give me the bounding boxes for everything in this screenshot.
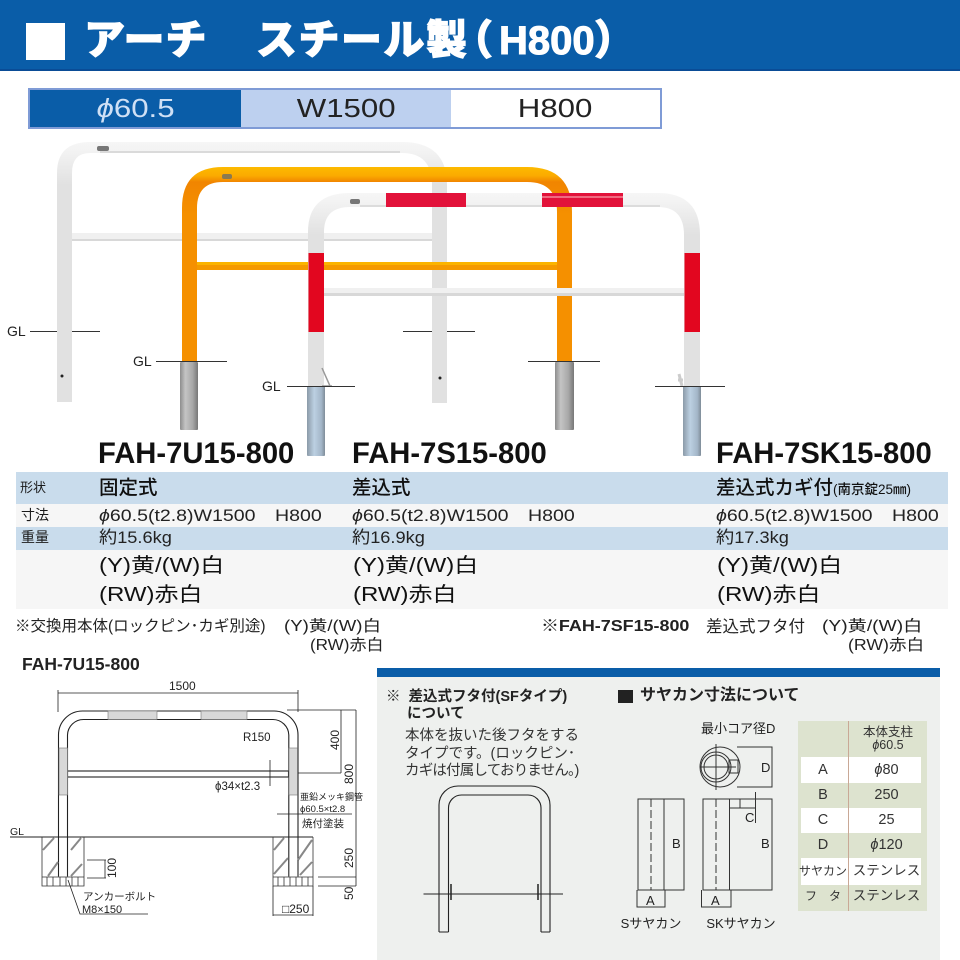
cell A value: ϕ80 — [874, 762, 899, 778]
dimension drawing — [10, 679, 363, 916]
colours 1: (Y)黄/(W)白 — [99, 555, 224, 577]
colours 3: (RW)赤白 — [717, 584, 821, 606]
sleeve heading square — [618, 690, 633, 703]
SK sleeve drawing — [702, 792, 776, 931]
title: （ — [452, 17, 493, 63]
SF type heading: ※ 差込式フタ付(SFタイプ) — [386, 689, 567, 705]
colours 3 — [717, 555, 842, 606]
tab: diameter: ϕ60.5 — [96, 93, 175, 123]
info panel — [377, 668, 940, 960]
orange barrier sleeves — [180, 362, 574, 430]
dimension labels: 250 — [342, 848, 356, 868]
dimension labels: 800 — [342, 764, 356, 784]
tab: height — [451, 90, 660, 127]
SK sleeve drawing: A — [711, 893, 720, 908]
cell C: C — [818, 812, 828, 828]
minimum core diameter drawing: 最小コア径D — [701, 721, 775, 736]
orange fixed barrier — [182, 167, 572, 362]
SF type description — [405, 727, 579, 779]
sleeve dimension table — [798, 721, 927, 911]
row material sleeve — [801, 858, 921, 885]
table header — [863, 725, 913, 752]
row band: weight — [16, 527, 948, 550]
row band: colours — [16, 550, 948, 609]
row label: shape: 形状 — [20, 480, 46, 495]
title: スチール製 — [256, 17, 468, 63]
SF type description: カギは付属しておりません｡) — [405, 763, 579, 779]
note: FAH-7SF15-800: ※FAH-7SF15-800 — [541, 618, 689, 635]
column divider — [848, 721, 849, 911]
weight 1: 約15.6kg — [99, 528, 172, 547]
arch outline — [58, 711, 298, 876]
tab: width — [241, 90, 451, 127]
SF type arch drawing — [424, 786, 563, 932]
colours 1: (RW)赤白 — [99, 584, 203, 606]
model FAH-7S15-800: FAH-7S15-800 — [352, 438, 547, 470]
header banner — [0, 0, 960, 71]
tab: height: H800 — [518, 93, 593, 123]
SF type heading: について — [407, 706, 465, 722]
sleeve dimensions heading: サヤカン寸法について — [640, 687, 800, 704]
table header: ϕ60.5 — [872, 738, 904, 752]
cell B value: 250 — [874, 787, 899, 803]
title: H800 — [499, 19, 595, 63]
shape: insert with key: 差込式カギ付(南京錠25㎜) — [716, 477, 911, 499]
SF type heading — [386, 688, 567, 722]
dimension labels: 400 — [328, 730, 342, 750]
cell sleeve: サヤカン — [799, 864, 847, 878]
dimension labels: ϕ34×t2.3 — [215, 781, 260, 793]
dimension labels: 亜鉛メッキ鋼管 — [300, 791, 363, 802]
row band: shape — [16, 472, 948, 504]
colours 2: (RW)赤白 — [353, 584, 457, 606]
S sleeve drawing: A — [646, 893, 655, 908]
title — [84, 17, 635, 63]
cell D: D — [818, 837, 828, 853]
model FAH-7SK15-800: FAH-7SK15-800 — [716, 438, 932, 470]
shape: fixed: 固定式 — [99, 477, 158, 499]
white barrier ground lines: GL — [7, 323, 26, 339]
dimension labels: 50 — [342, 886, 356, 900]
note: replacement colours Y W: (Y)黄/(W)白 — [284, 618, 381, 635]
row band: size — [16, 504, 948, 527]
minimum core diameter drawing — [700, 721, 775, 790]
note: replacement colour RW: (RW)赤白 — [310, 637, 384, 654]
colours 1 — [99, 555, 224, 606]
S sleeve drawing: B — [672, 836, 681, 851]
cell B: B — [818, 787, 828, 803]
size 3: ϕ60.5(t2.8)W1500 H800 — [716, 506, 939, 525]
note: replacement body: ※交換用本体(ロックピン･カギ別途) — [15, 618, 266, 635]
note: FAH-7SF colour RW: (RW)赤白 — [848, 637, 924, 654]
note: lid type: 差込式フタ付 — [706, 618, 805, 636]
dimension labels — [82, 679, 363, 916]
SK sleeve drawing: C — [745, 810, 754, 825]
title: アーチ — [84, 17, 208, 63]
dimension labels: 1500 — [169, 679, 196, 693]
dimension labels: アンカーボルト — [83, 891, 156, 903]
tab: diameter — [30, 90, 241, 127]
colour band hatches — [59, 711, 298, 795]
cell D value: ϕ120 — [870, 837, 903, 853]
cell lid value: ステンレス — [853, 888, 920, 903]
spec table — [16, 472, 948, 609]
size 2: ϕ60.5(t2.8)W1500 H800 — [352, 506, 575, 525]
colours 2: (Y)黄/(W)白 — [353, 555, 478, 577]
minimum core diameter drawing: D — [761, 760, 770, 775]
dimension labels: R150 — [243, 732, 270, 744]
weight 3: 約17.3kg — [716, 528, 789, 547]
shape: insert: 差込式 — [352, 477, 411, 499]
size 1: ϕ60.5(t2.8)W1500 H800 — [99, 506, 322, 525]
drawing heading: FAH-7U15-800 — [22, 654, 140, 674]
header square icon — [26, 23, 65, 60]
SF type description: タイプです。(ロックピン･ — [405, 746, 575, 762]
SK sleeve drawing: SKサヤカン — [706, 916, 776, 931]
title: ） — [594, 17, 635, 63]
row C — [801, 808, 921, 833]
colours 3: (Y)黄/(W)白 — [717, 555, 842, 577]
insert barrier ground lines: GL — [262, 378, 281, 394]
table header: 本体支柱 — [863, 725, 913, 739]
dimension labels: M8×150 — [82, 904, 122, 916]
SF type description: 本体を抜いた後フタをする — [405, 728, 579, 744]
row label: size: 寸法 — [21, 507, 49, 523]
S sleeve drawing — [621, 799, 684, 931]
cell lid: フ タ — [805, 889, 841, 903]
insert barrier sleeves — [307, 386, 701, 456]
dimension labels: 焼付塗装 — [302, 817, 344, 830]
dimension labels: □250 — [282, 902, 310, 916]
weight 2: 約16.9kg — [352, 528, 425, 547]
spec tabs — [28, 88, 662, 129]
tab: width: W1500 — [297, 93, 395, 123]
panel top bar — [377, 668, 940, 677]
dimension lines — [58, 690, 356, 916]
red and white insert barrier — [308, 193, 700, 386]
colours 2 — [353, 555, 478, 606]
S sleeve drawing: Sサヤカン — [621, 916, 681, 931]
orange barrier ground lines: GL — [133, 353, 152, 369]
model FAH-7U15-800: FAH-7U15-800 — [98, 438, 294, 470]
dimension labels: ϕ60.5×t2.8 — [300, 804, 345, 815]
foundations — [42, 837, 313, 886]
cell C value: 25 — [878, 812, 895, 828]
product photos: three arch barriers — [7, 142, 725, 456]
cell A: A — [818, 762, 828, 778]
ground line and GL label: GL — [10, 826, 24, 838]
note: FAH-7SF colours Y W: (Y)黄/(W)白 — [822, 618, 922, 635]
SK sleeve drawing: B — [761, 836, 770, 851]
dimension labels: 100 — [105, 858, 119, 878]
white fixed barrier — [57, 142, 447, 403]
row label: weight: 重量 — [21, 529, 49, 545]
row A — [801, 757, 921, 783]
cell sleeve value: ステンレス — [853, 863, 920, 878]
